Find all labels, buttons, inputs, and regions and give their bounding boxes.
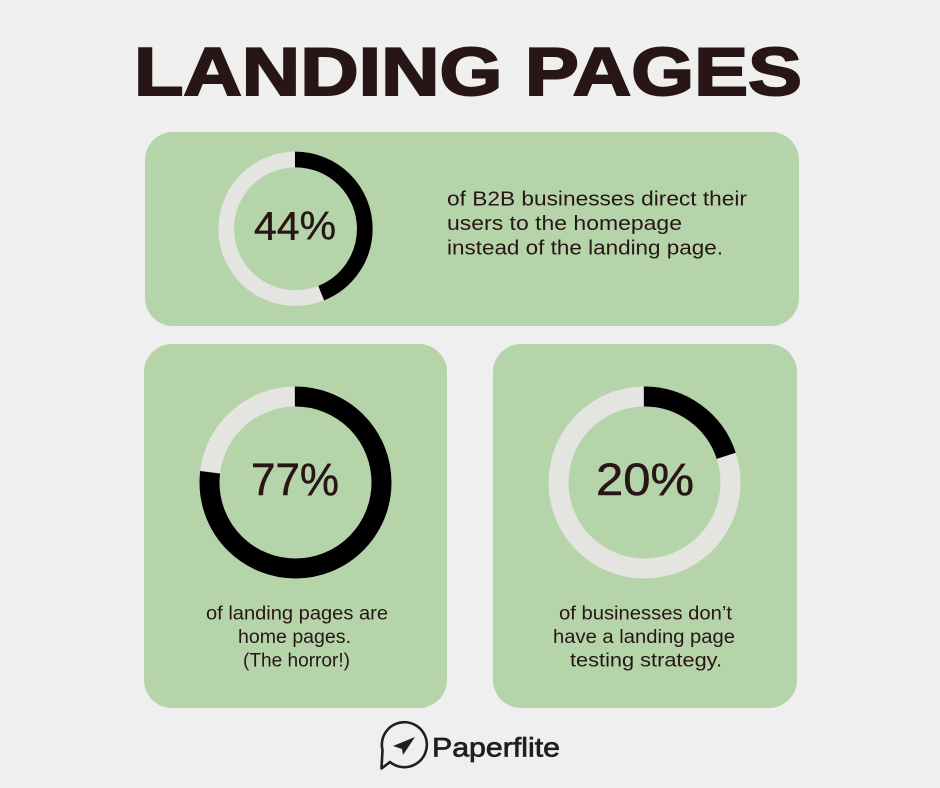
- description: 77%: (The horror!): [243, 650, 350, 672]
- value: 77%: 77%: [251, 454, 339, 505]
- description: 44%: instead of the landing page.: [447, 238, 723, 260]
- value: 44%: 44%: [254, 204, 336, 248]
- panel: 20% statistic: [493, 344, 797, 708]
- title: LANDING PAGES: [134, 34, 802, 110]
- description: 44%: [447, 188, 747, 260]
- donut chart: 20%: [558, 396, 730, 568]
- description: 77%: home pages.: [238, 627, 351, 648]
- wordmark: Paperflite: [432, 732, 560, 762]
- donut chart: 44%: [226, 160, 365, 298]
- logo: Paperflite: [382, 722, 560, 768]
- description: 20%: [553, 604, 735, 672]
- description: 44%: users to the homepage: [447, 213, 682, 235]
- panel: 44% statistic: [145, 132, 799, 326]
- icon: speech bubble with paper plane: [382, 722, 427, 768]
- panel: 77% statistic: [144, 344, 447, 708]
- value: 20%: 20%: [596, 454, 694, 505]
- description: 44%: of B2B businesses direct their: [447, 188, 747, 210]
- description: 20%: of businesses don’t: [559, 604, 733, 624]
- description: 77%: of landing pages are: [206, 604, 388, 624]
- description: 20%: testing strategy.: [570, 650, 722, 672]
- description: 20%: have a landing page: [553, 627, 735, 648]
- donut chart: 77%: [210, 396, 382, 568]
- description: 77%: [206, 604, 388, 672]
